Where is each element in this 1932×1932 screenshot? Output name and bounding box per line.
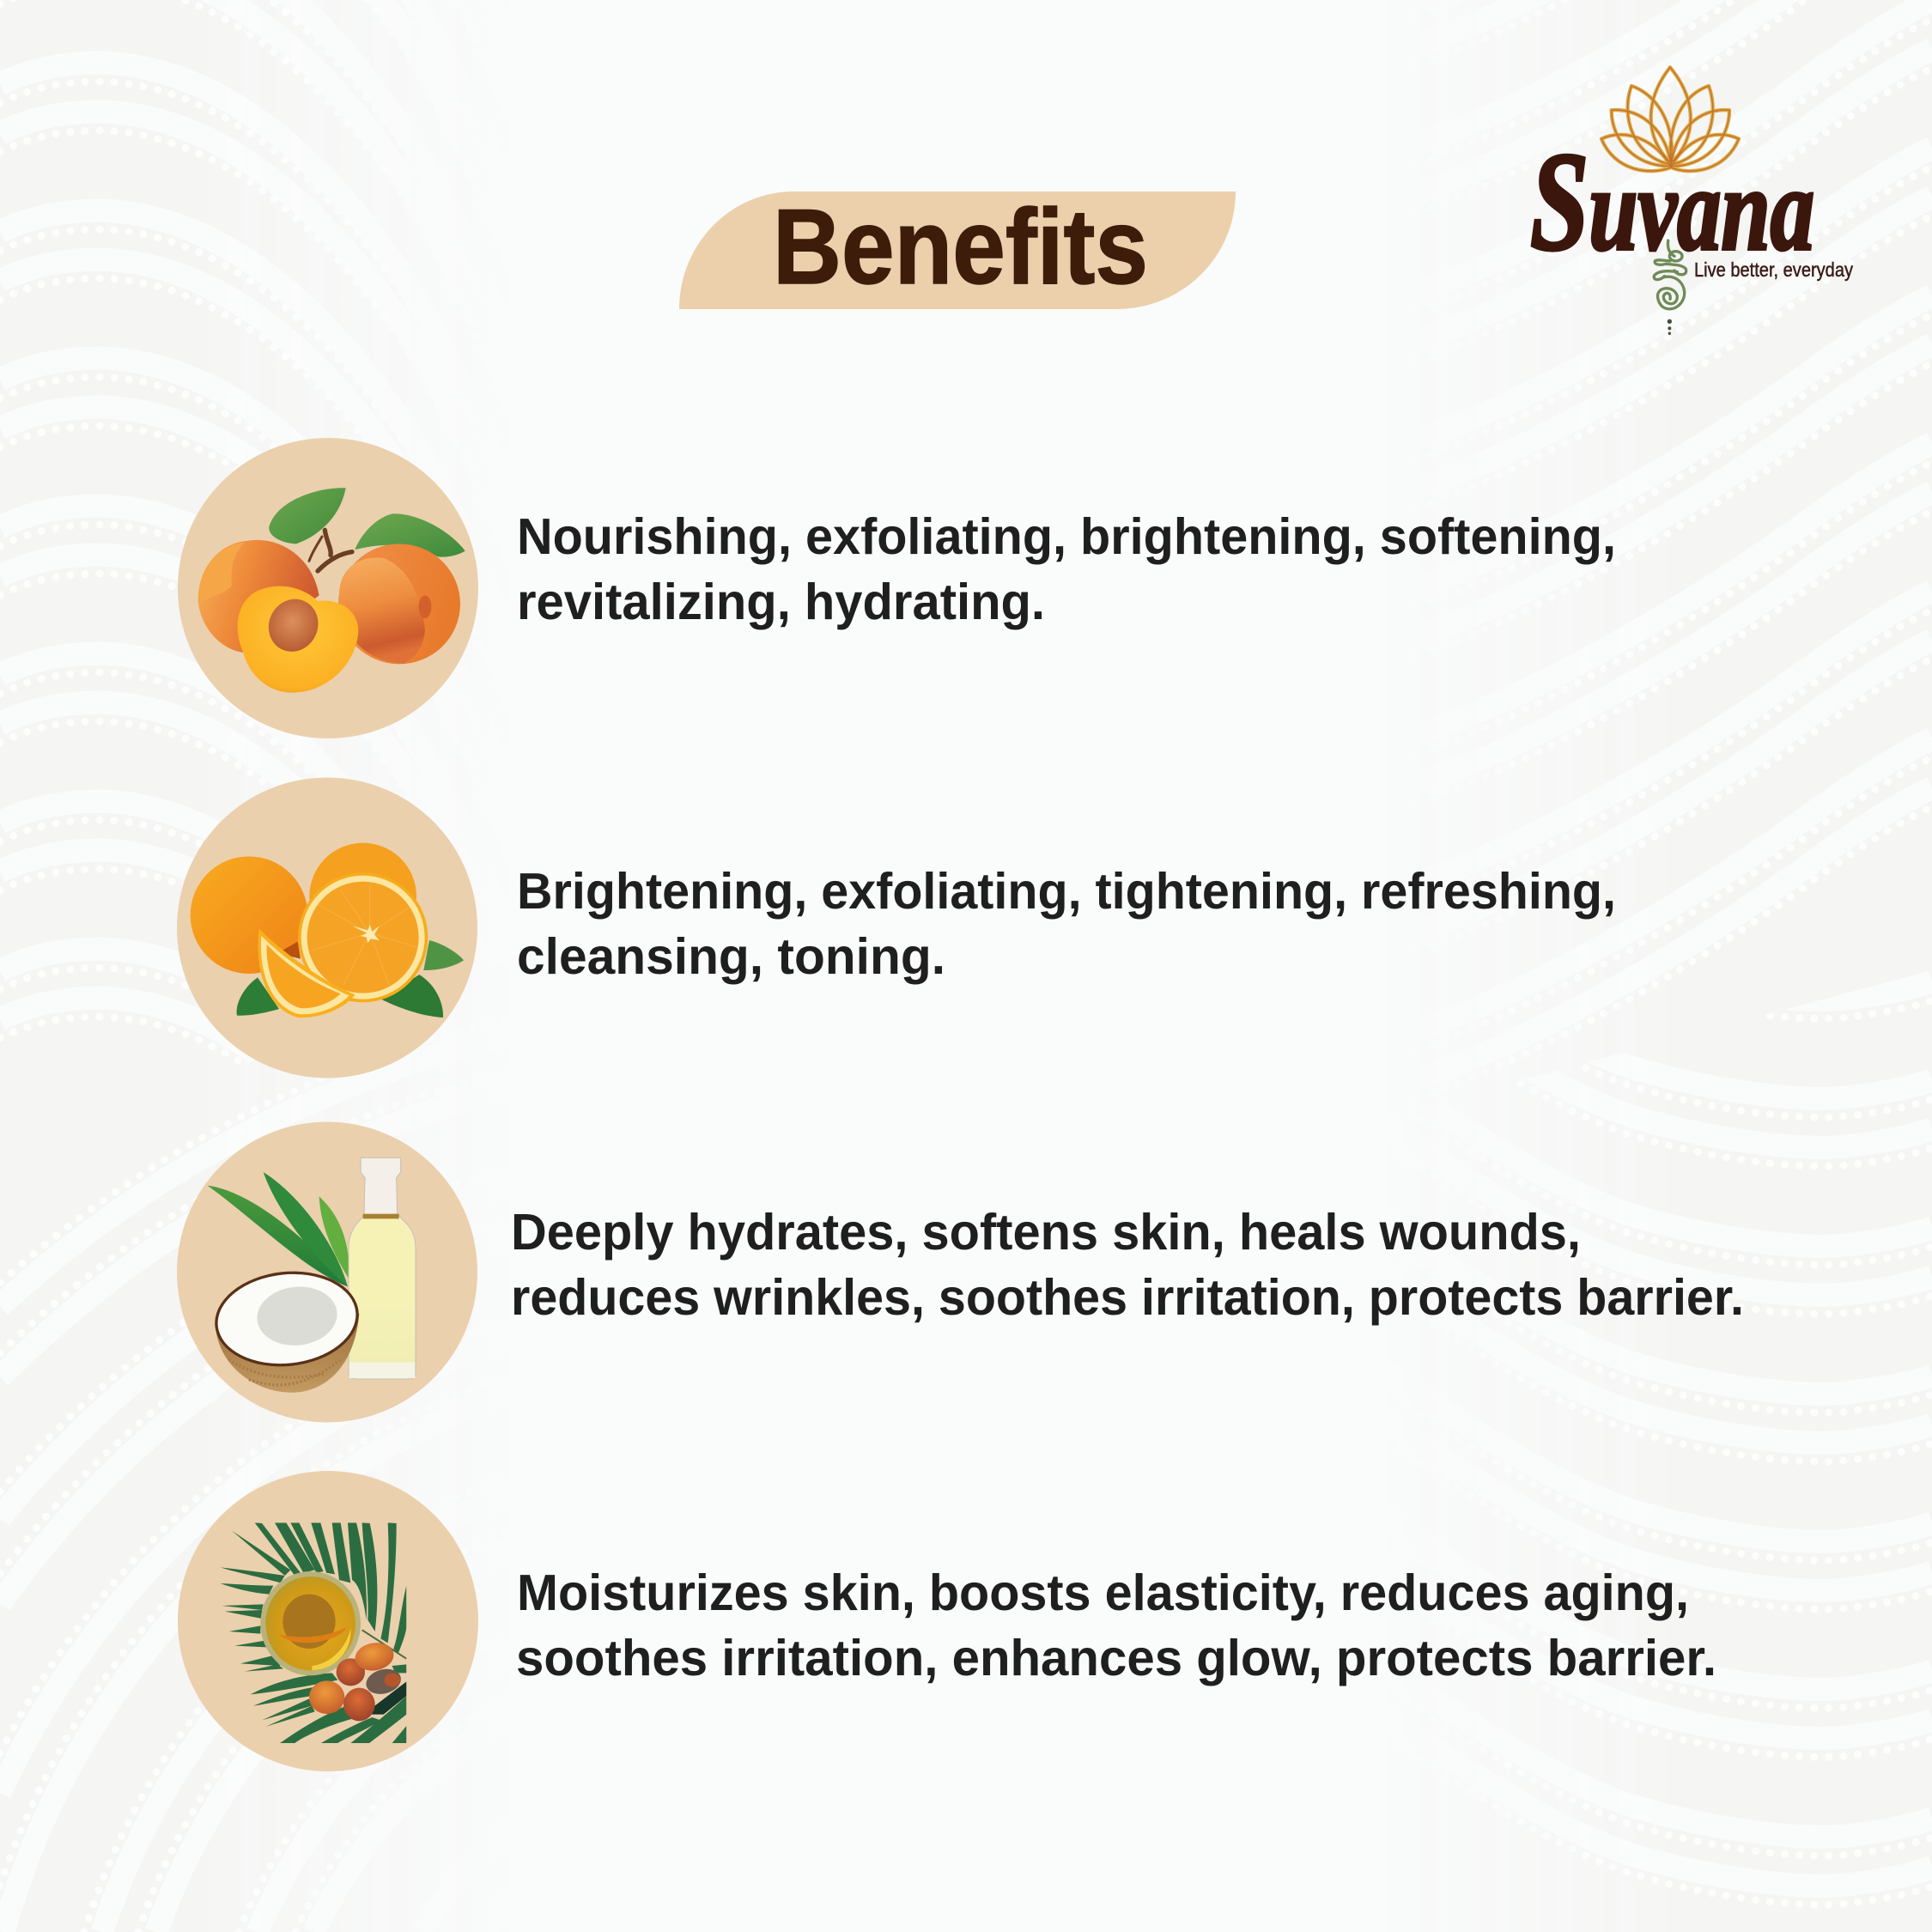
logo wordmark: Suvana <box>1530 123 1814 280</box>
benefit text 1: Nourishing, exfoliating, brightening, softening, <box>517 508 1616 565</box>
icon: gold lotus <box>1601 67 1739 171</box>
benefit text 1: revitalizing, hydrating. <box>517 574 1045 630</box>
icon: coconut and oil bottle in circle <box>177 1121 477 1422</box>
benefit text 3: Deeply hydrates, softens skin, heals wounds, <box>511 1204 1581 1261</box>
benefit text 4: soothes irritation, enhances glow, protects barrier. <box>516 1630 1716 1686</box>
benefit text 4: Moisturizes skin, boosts elasticity, reduces aging, <box>517 1564 1689 1621</box>
banner shape <box>679 191 1236 309</box>
benefit text 2 <box>517 863 1616 985</box>
benefit text 1 <box>517 508 1616 630</box>
benefit text 3: reduces wrinkles, soothes irritation, protects barrier. <box>511 1269 1744 1326</box>
title banner <box>679 188 1236 309</box>
logo tagline: Live better, everyday <box>1694 258 1853 281</box>
heading: Benefits: Benefits <box>773 188 1148 307</box>
icon: green unalome <box>1654 240 1686 335</box>
benefit text 3 <box>511 1204 1744 1326</box>
panel: coconut benefits <box>177 1121 1744 1422</box>
benefit text 2: cleansing, toning. <box>517 928 945 985</box>
panel: palm oil benefits <box>178 1471 1716 1771</box>
benefit text 4 <box>516 1564 1716 1686</box>
icon: palm oil bowl and fruits in circle <box>178 1471 478 1771</box>
panel: apricot benefits <box>178 438 1616 738</box>
icon: oranges in circle <box>177 778 477 1078</box>
benefit text 2: Brightening, exfoliating, tightening, refreshing, <box>517 863 1616 920</box>
icon: apricots in circle <box>178 438 478 738</box>
logo: Suvana <box>1530 67 1853 335</box>
panel: orange benefits <box>177 778 1616 1078</box>
